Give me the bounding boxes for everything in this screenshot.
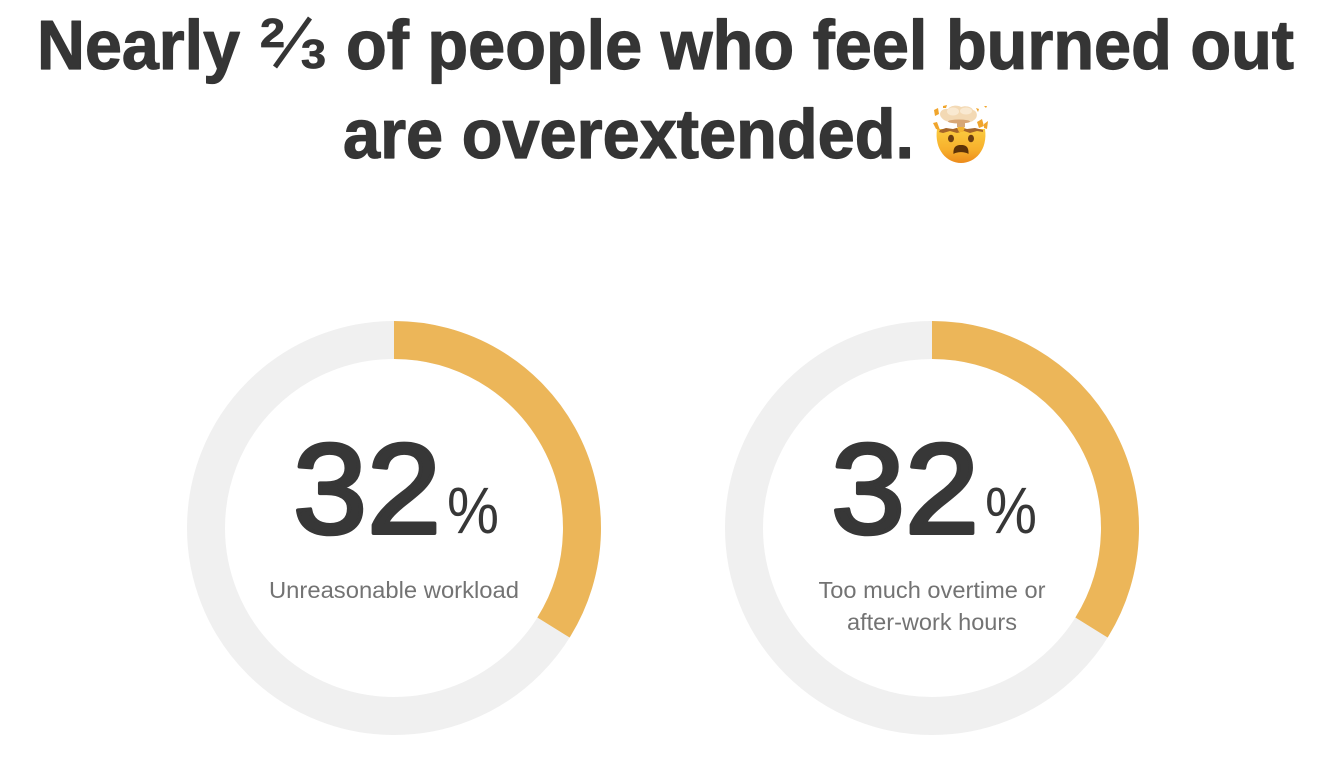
title: are overextended. (343, 95, 914, 173)
label: unreasonable workload: Unreasonable workload (269, 577, 519, 603)
panel: unreasonable workload (206, 340, 582, 716)
title: 2 (260, 10, 285, 56)
value: 32%: 32 (831, 418, 979, 561)
title: 3 (301, 31, 326, 77)
title: of people who feel burned out (346, 6, 1294, 84)
value: 32%: 32 (293, 418, 441, 561)
icon: exploding head emoji (933, 105, 988, 163)
donut chart: 32% (744, 340, 1120, 716)
value: 32% (293, 418, 499, 561)
value: 32% (831, 418, 1037, 561)
value: 32%: % (447, 473, 499, 547)
label: too much overtime or after-work hours: Too much overtime or (818, 577, 1046, 603)
value: 32%: % (985, 473, 1037, 547)
label: too much overtime or after-work hours (818, 577, 1046, 635)
panel: too much overtime (744, 340, 1120, 716)
title: Nearly (37, 6, 240, 84)
label: too much overtime or after-work hours: after-work hours (847, 609, 1017, 635)
title (37, 6, 1294, 173)
donut chart: 32% (206, 340, 582, 716)
